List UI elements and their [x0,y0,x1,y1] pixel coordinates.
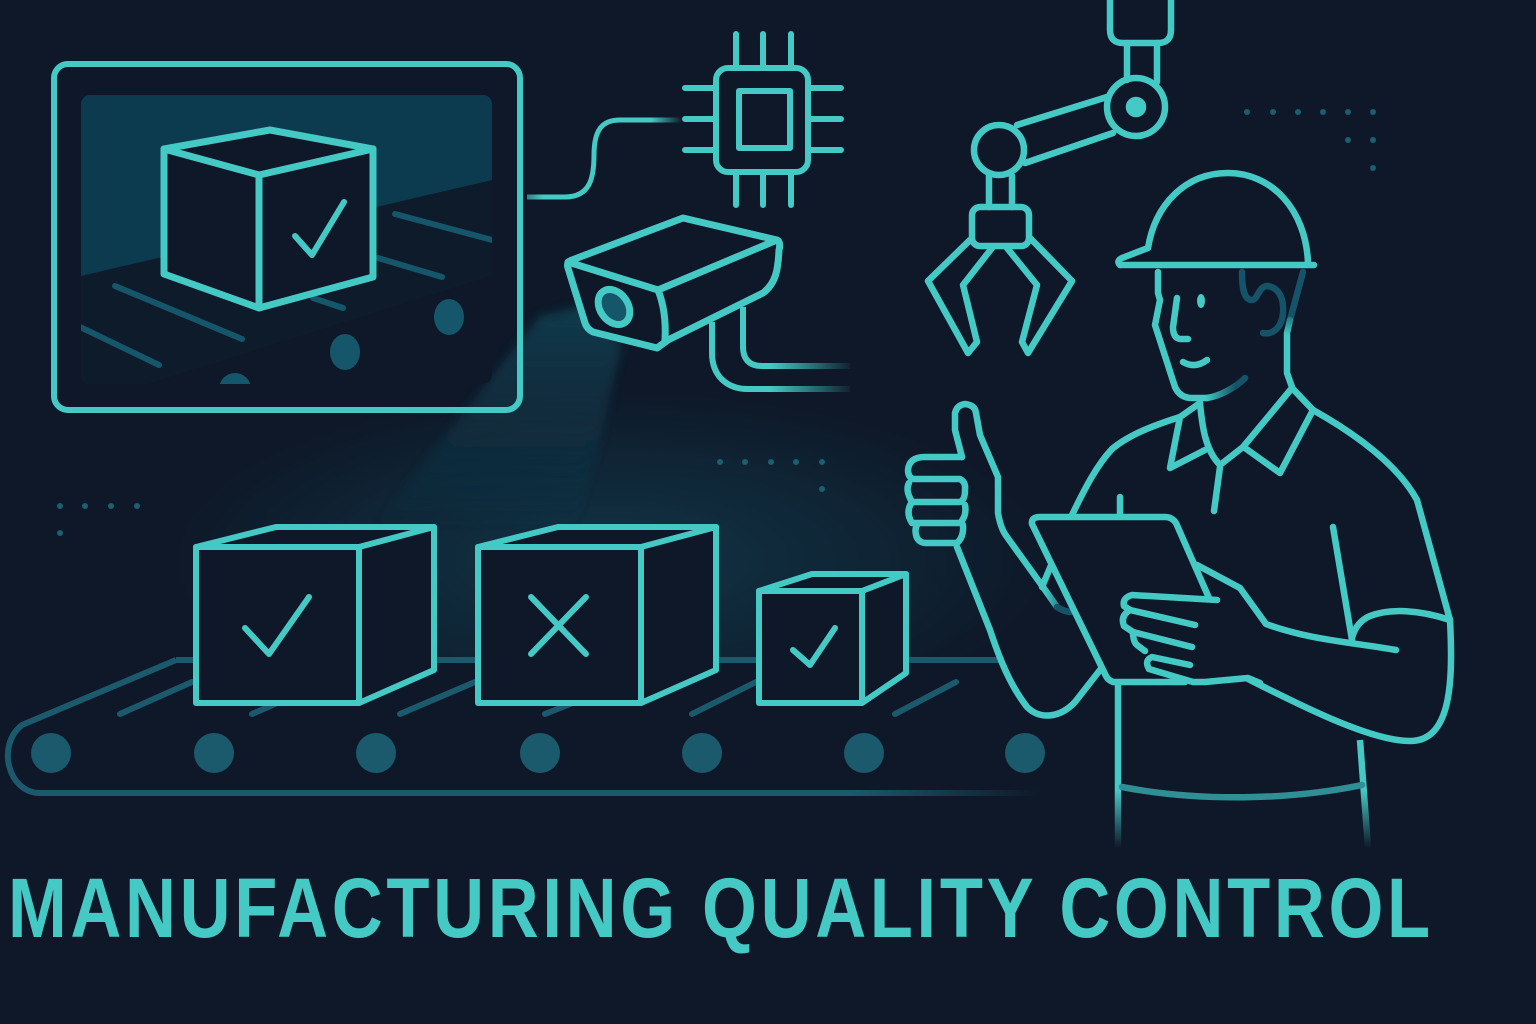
tablet [1032,517,1212,684]
icon: inspected box [164,130,373,308]
icon: rejected box [478,527,716,703]
thumbs up hand [908,404,1100,716]
icon: security camera [568,218,850,389]
icon: passed box 2 [759,574,906,703]
decorative dots [57,109,1376,536]
worker torso lower [1118,685,1368,848]
icon: processor chip [685,34,841,205]
connector: monitor to chip [527,120,682,197]
icon: robotic arm [928,0,1171,353]
background glow [292,431,943,657]
conveyor belt [8,660,1045,793]
worker illustration [908,173,1451,848]
icon: passed box 1 [196,527,434,703]
shirt and collar [1072,388,1451,741]
waist line [1122,785,1362,797]
face [1155,272,1303,398]
holding hand [1113,595,1260,683]
hard hat [1118,173,1314,265]
panel: inspection monitor [54,64,520,410]
title: MANUFACTURING QUALITY CONTROL [8,862,1430,955]
camera light beam [370,304,622,530]
